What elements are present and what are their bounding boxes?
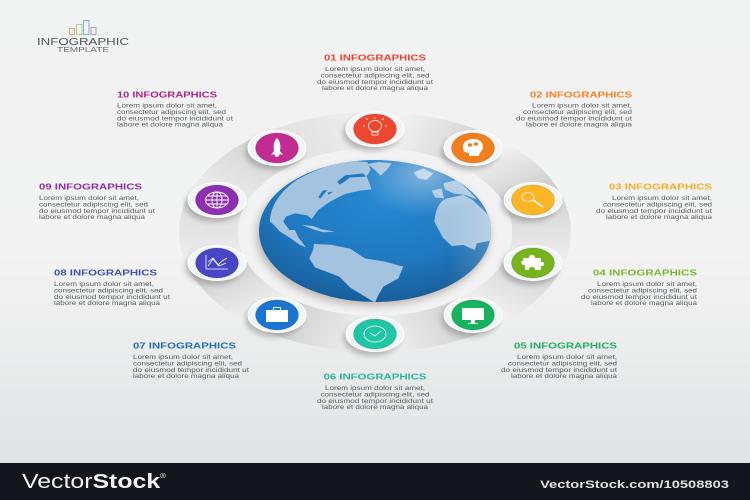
text block 07: Lorem ipsum dolor sit amet, <box>133 354 233 361</box>
text block 02 <box>516 90 633 128</box>
globe <box>256 160 493 306</box>
text block 07: labore et dolore magna aliqua <box>133 373 240 380</box>
north america <box>270 161 372 247</box>
text block 01 <box>317 54 433 92</box>
greenland <box>367 162 392 176</box>
text block 09 <box>39 182 155 221</box>
text block 03: consectetur adipiscing elit, sed <box>603 202 713 208</box>
text block 09: 09 INFOGRAPHICS <box>39 182 143 192</box>
text block 04: Lorem ipsum dolor sit amet, <box>597 281 697 288</box>
node 08: line chart <box>185 246 246 285</box>
icon: rocket <box>271 138 283 157</box>
text block 01: 01 INFOGRAPHICS <box>324 54 427 62</box>
text block 04: labore et dolore magna aliqua <box>591 300 698 307</box>
text block 08: do eiusmod tempor incididunt ut <box>54 294 170 301</box>
icon: bar chart logo <box>70 20 96 34</box>
text block 06: do eiusmod tempor incididunt ut <box>317 398 433 405</box>
text block 07 <box>133 342 249 380</box>
text block 02: Lorem ipsum dolor sit amet, <box>532 102 632 110</box>
text block 03: Lorem ipsum dolor sit amet, <box>612 195 712 202</box>
text block 05: consectetur adipiscing elit, sed <box>508 360 618 368</box>
text block 06: labore et dolore magna aliqua <box>322 404 429 411</box>
icon: web globe <box>206 192 228 208</box>
text block 08: Lorem ipsum dolor sit amet, <box>54 281 154 288</box>
icon: monitor <box>462 308 484 324</box>
text block 08: consectetur adipiscing elit, sed <box>54 288 164 294</box>
text block 03: labore et dolore magna aliqua <box>606 214 713 221</box>
text block 10: labore et dolore magna aliqua <box>117 122 224 128</box>
node 10: rocket <box>245 130 306 170</box>
text block 10: consectetur adipiscing elit, sed <box>117 109 227 116</box>
icon: briefcase <box>266 307 288 322</box>
text block 10: do eiusmod tempor incididunt ut <box>117 116 233 122</box>
logo title: INFOGRAPHIC <box>37 36 130 48</box>
text block 06: 06 INFOGRAPHICS <box>324 372 427 382</box>
europe <box>413 168 477 199</box>
text block 06: consectetur adipiscing elit, sed <box>320 392 430 398</box>
footer url: VectorStock.com/10508803 <box>540 479 729 491</box>
node 09: globe <box>185 182 246 222</box>
text block 03: do eiusmod tempor incididunt ut <box>596 208 712 215</box>
footer logo: Vector Stock <box>22 470 148 493</box>
node 02: head with gears <box>441 130 502 170</box>
inner white ring <box>238 148 512 316</box>
text block 05: 05 INFOGRAPHICS <box>514 342 618 350</box>
node 06: clock <box>343 316 404 356</box>
text block 08: 08 INFOGRAPHICS <box>54 268 158 278</box>
text block 05 <box>501 342 618 380</box>
icon: puzzle piece <box>521 255 544 270</box>
logo: infographic template <box>37 20 130 54</box>
text block 06 <box>317 372 433 411</box>
text block 01: Lorem ipsum dolor sit amet, <box>325 66 425 73</box>
icon: bulb <box>363 117 387 135</box>
text block 08 <box>54 268 170 307</box>
text block 09: Lorem ipsum dolor sit amet, <box>39 195 139 202</box>
text block 02: do eiusmod tempor incididunt ut <box>516 116 632 122</box>
great lakes <box>318 190 333 198</box>
icon: head <box>463 139 483 156</box>
text block 07: consectetur adipiscing elit, sed <box>133 360 243 368</box>
text block 10: 10 INFOGRAPHICS <box>117 90 218 100</box>
text block 02: consectetur adipiscing elit, sed <box>523 109 633 116</box>
text block 05: do eiusmod tempor incididunt ut <box>501 367 617 374</box>
caribbean <box>302 225 335 232</box>
text block 05: labore et dolore magna aliqua <box>511 373 618 380</box>
text block 09: do eiusmod tempor incididunt ut <box>39 208 155 215</box>
circular ring band <box>208 130 542 334</box>
africa <box>434 195 493 250</box>
node 04: puzzle <box>501 246 562 285</box>
node 07: briefcase <box>245 298 306 337</box>
text block 04: 04 INFOGRAPHICS <box>593 268 698 278</box>
node 01: light bulb <box>343 112 404 151</box>
text block 01: do eiusmod tempor incididunt ut <box>317 79 433 86</box>
text block 05: Lorem ipsum dolor sit amet, <box>517 354 617 361</box>
icon: clock <box>364 326 386 342</box>
text block 03 <box>596 182 713 221</box>
icon: magnifier <box>522 192 543 207</box>
text block 07: 07 INFOGRAPHICS <box>133 342 237 350</box>
text block 02: labore et dolore magna aliqua <box>526 122 633 128</box>
footer bar <box>0 463 750 500</box>
icon: chart <box>206 255 228 269</box>
text block 01: labore et dolore magna aliqua <box>322 85 429 92</box>
text block 04: do eiusmod tempor incididunt ut <box>581 294 697 301</box>
node 05: monitor <box>441 298 502 337</box>
text block 02: 02 INFOGRAPHICS <box>530 90 633 100</box>
text block 09: consectetur adipiscing elit, sed <box>39 202 149 208</box>
text block 08: labore et dolore magna aliqua <box>54 300 161 307</box>
node 03: magnifier <box>501 182 562 222</box>
text block 06: Lorem ipsum dolor sit amet, <box>325 385 425 392</box>
south america <box>309 244 403 303</box>
text block 10: Lorem ipsum dolor sit amet, <box>117 102 217 110</box>
logo subtitle: TEMPLATE <box>57 47 109 54</box>
footer logo: ® <box>160 472 166 480</box>
text block 01: consectetur adipiscing elit, sed <box>320 72 430 80</box>
continents <box>270 161 493 303</box>
text block 10 <box>117 90 233 128</box>
text block 03: 03 INFOGRAPHICS <box>609 182 713 192</box>
text block 07: do eiusmod tempor incididunt ut <box>133 367 249 374</box>
text block 04 <box>581 268 698 307</box>
text block 04: consectetur adipiscing elit, sed <box>588 288 698 294</box>
text block 09: labore et dolore magna aliqua <box>39 214 146 221</box>
hudson bay <box>337 173 366 185</box>
